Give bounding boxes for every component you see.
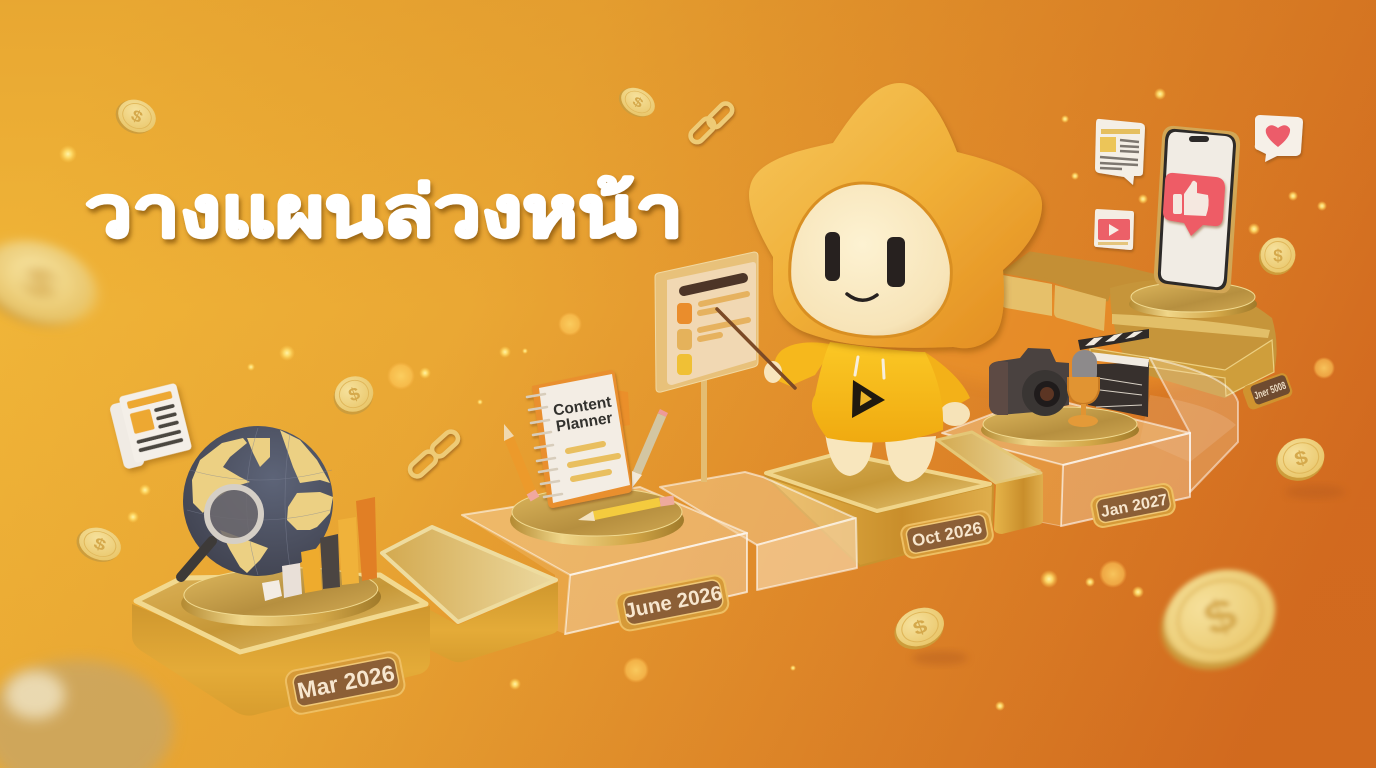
date label: Oct 2026 (900, 510, 994, 559)
notebook: Planner (555, 410, 614, 435)
date label: Oct 2026: Oct 2026 (910, 518, 984, 551)
icon: left orange pencil (504, 424, 535, 499)
glass block June 2026 (462, 487, 747, 634)
date label: Mar 2026: Mar 2026 (295, 660, 397, 704)
icon: front yellow pencil (578, 500, 674, 521)
notebook (527, 370, 632, 508)
step 4: curved glass platform (1140, 358, 1238, 492)
like badge (1163, 173, 1225, 236)
icon: notebook tab (615, 390, 630, 427)
character legs (825, 432, 936, 482)
notebook lines (568, 444, 618, 479)
character hoodie (812, 342, 943, 442)
date label: Jan 2027 (1090, 482, 1176, 529)
gold block between Mar and June (382, 527, 558, 662)
notebook text: Content (552, 394, 613, 420)
bar chart (262, 497, 377, 601)
step 5 disk (1129, 282, 1257, 318)
character smile (847, 294, 877, 300)
title: วางแผนล่วงหน้า (85, 173, 683, 251)
date label: June 2026: June 2026 (622, 582, 724, 623)
social bubble: article (1095, 119, 1145, 185)
step 1 disk (180, 565, 382, 629)
microphone icon (1068, 350, 1099, 427)
step 1 platform: Mar 2026 (132, 575, 430, 716)
glass block behind Oct (660, 472, 857, 590)
presentation board (655, 252, 758, 482)
character arms and pointer (717, 309, 970, 426)
chain links (407, 101, 735, 479)
notebook spiral (527, 394, 562, 497)
date label: far step (1241, 372, 1294, 411)
hoodie play logo (852, 380, 885, 418)
date label: June 2026 (615, 574, 730, 632)
step 4 disk (981, 407, 1139, 447)
newspaper icon (107, 383, 193, 470)
icon: grey pencil (632, 411, 664, 488)
pencils and notebook (504, 370, 674, 521)
character star hood (749, 83, 1042, 348)
magnifier icon (181, 487, 261, 577)
phone icon (1154, 126, 1240, 293)
step 5: far gold arc platform (1000, 253, 1277, 398)
clapperboard icon (1077, 329, 1149, 417)
step 2 disk (510, 488, 684, 546)
camera icon (989, 348, 1069, 416)
date label: Jan 2027: Jan 2027 (1099, 491, 1169, 521)
date label: far step: Jner 5008 (1253, 380, 1288, 402)
character eyes (825, 232, 905, 287)
gold block between Oct and Jan (937, 432, 1043, 534)
mascot character (717, 83, 1042, 482)
step 3 platform: Oct 2026 base (765, 476, 993, 566)
social bubble: video (1094, 209, 1134, 250)
bokeh lights (59, 88, 1335, 711)
globe icon (183, 426, 333, 576)
step 3 platform: Oct 2026 top (766, 453, 990, 511)
date label: Mar 2026 (284, 650, 406, 716)
social bubble: heart (1255, 115, 1303, 162)
glass block Jan 2027 (942, 396, 1190, 526)
character face (790, 183, 951, 337)
